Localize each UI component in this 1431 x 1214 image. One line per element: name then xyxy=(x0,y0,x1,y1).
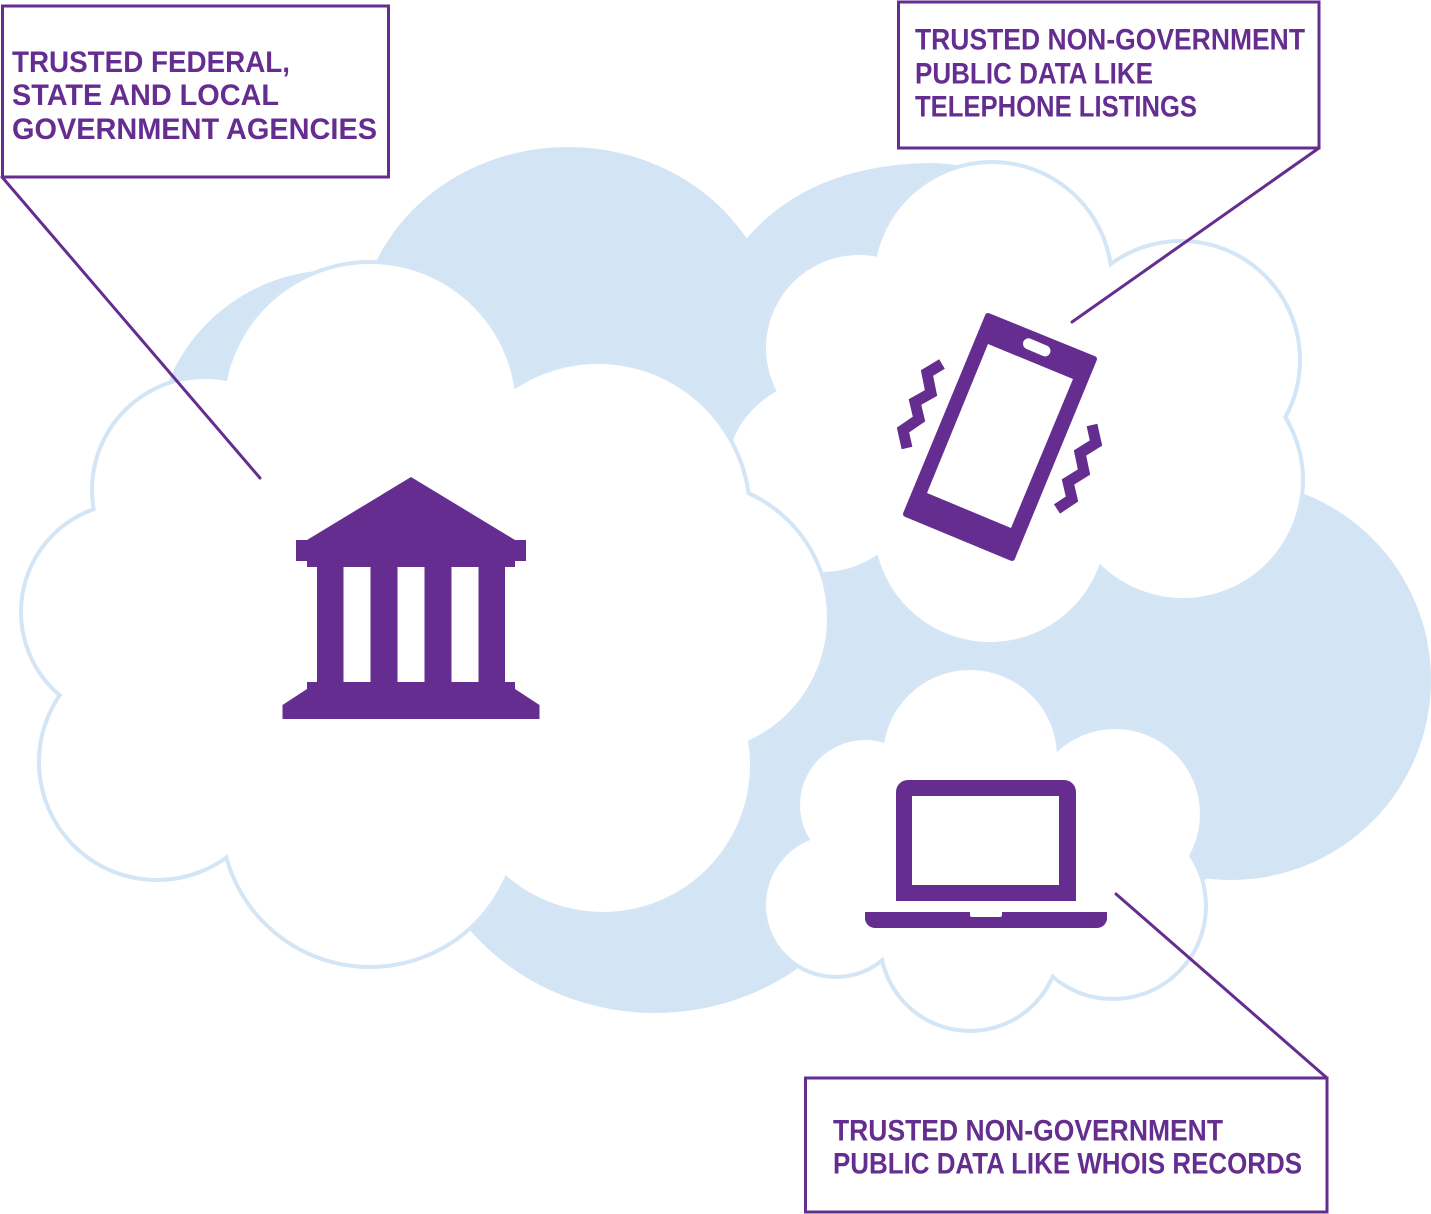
icon: vibrating phone xyxy=(903,316,1096,558)
laptop cloud xyxy=(766,670,1204,1029)
background cloud xyxy=(155,147,1431,1013)
callout: whois records xyxy=(806,894,1327,1212)
callout: telephone listings: TRUSTED NON-GOVERNMENT xyxy=(915,24,1305,56)
callout: telephone listings: TELEPHONE LISTINGS xyxy=(915,90,1197,124)
icon: laptop xyxy=(865,780,1107,928)
callout: government agencies xyxy=(2,6,388,478)
callout: government agencies: TRUSTED FEDERAL, xyxy=(12,46,290,79)
icon: government building xyxy=(282,477,540,719)
callout: government agencies: GOVERNMENT AGENCIES xyxy=(12,113,377,146)
callout: whois records: PUBLIC DATA LIKE WHOIS RECORDS xyxy=(833,1148,1302,1180)
callout: telephone listings: PUBLIC DATA LIKE xyxy=(915,58,1153,90)
callout: telephone listings xyxy=(898,2,1319,322)
phone cloud xyxy=(726,164,1301,642)
callout: government agencies: STATE AND LOCAL xyxy=(12,79,279,112)
callout: whois records: TRUSTED NON-GOVERNMENT xyxy=(833,1114,1223,1148)
large cloud: government xyxy=(23,264,827,965)
